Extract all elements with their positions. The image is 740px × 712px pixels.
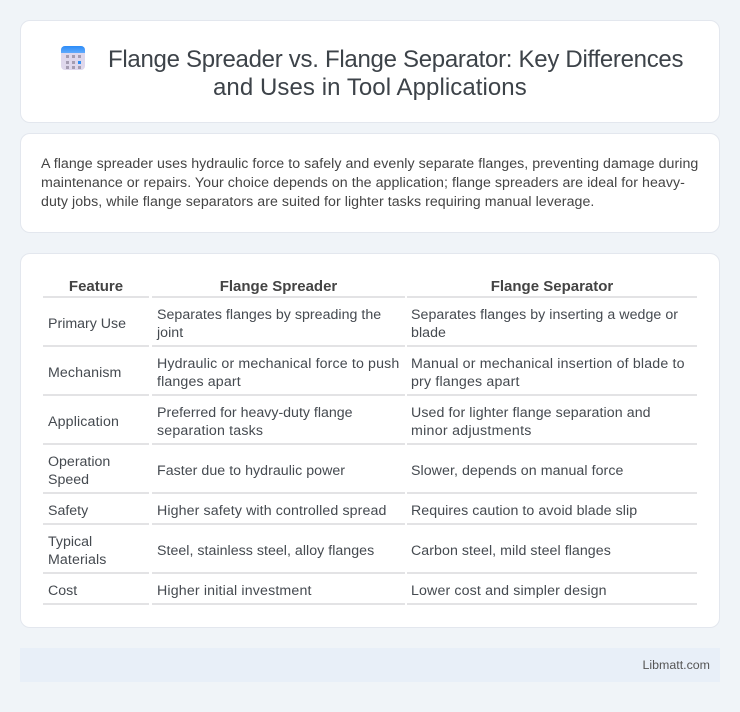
row: application: [48, 405, 651, 439]
title: Flange Spreader vs. Flange Separator: Key Differences: [108, 46, 683, 73]
row: safety: Safety: [48, 503, 88, 519]
table header: [69, 278, 613, 295]
row: cost: [48, 583, 607, 599]
row: operation speed: Slower, depends on manual force: [411, 463, 623, 479]
row: primary use: [48, 307, 678, 341]
row: typical materials: Typical: [48, 534, 92, 550]
row: operation speed: Faster due to hydraulic power: [157, 463, 345, 479]
row: typical materials: Carbon steel, mild steel flanges: [411, 543, 611, 559]
icon: calendar: [61, 46, 85, 70]
row: primary use: Separates flanges by inserting a wedge or: [411, 307, 678, 323]
row: safety: Higher safety with controlled spread: [157, 503, 386, 519]
row: mechanism: Mechanism: [48, 365, 121, 381]
row: application: minor adjustments: [411, 423, 532, 439]
table header: Feature: [69, 278, 123, 295]
row: operation speed: Operation: [48, 454, 110, 470]
row: application: Used for lighter flange separation and: [411, 405, 651, 421]
title panel: [20, 20, 720, 123]
title: [108, 46, 683, 101]
intro text: A flange spreader uses hydraulic force to safely and evenly separate flanges, preventing damage during: [41, 156, 698, 172]
footer credit: Libmatt.com: [643, 658, 710, 672]
row: safety: [48, 503, 637, 519]
row: operation speed: [48, 454, 623, 488]
comparison table panel: [20, 253, 720, 628]
row: application: Preferred for heavy-duty flange: [157, 405, 353, 421]
intro text: [41, 156, 698, 210]
row: operation speed: Speed: [48, 472, 89, 488]
row: typical materials: Materials: [48, 552, 106, 568]
title: and Uses in Tool Applications: [213, 74, 527, 101]
intro text: maintenance or repairs. Your choice depends on the application; flange spreaders are ideal for heavy-: [41, 175, 685, 191]
row: mechanism: flanges apart: [157, 374, 241, 390]
row: application: Application: [48, 414, 119, 430]
row: mechanism: pry flanges apart: [411, 374, 520, 390]
table header: Flange Spreader: [220, 278, 337, 295]
row: cost: Lower cost and simpler design: [411, 583, 607, 599]
intro text: duty jobs, while flange separators are suited for lighter tasks requiring manual leverage.: [41, 194, 594, 210]
row: primary use: Primary Use: [48, 316, 126, 332]
row: cost: Higher initial investment: [157, 583, 312, 599]
row: primary use: blade: [411, 325, 446, 341]
row: safety: Requires caution to avoid blade slip: [411, 503, 637, 519]
row: typical materials: [48, 534, 611, 568]
intro panel: [20, 133, 720, 233]
footer bar: [20, 648, 720, 682]
row: primary use: Separates flanges by spreading the: [157, 307, 381, 323]
row: mechanism: Manual or mechanical insertion of blade to: [411, 356, 685, 372]
row: primary use: joint: [157, 325, 183, 341]
table header: Flange Separator: [491, 278, 613, 295]
row: mechanism: Hydraulic or mechanical force to push: [157, 356, 399, 372]
row: typical materials: Steel, stainless steel, alloy flanges: [157, 543, 374, 559]
row: application: separation tasks: [157, 423, 263, 439]
row: mechanism: [48, 356, 685, 390]
row: cost: Cost: [48, 583, 77, 599]
